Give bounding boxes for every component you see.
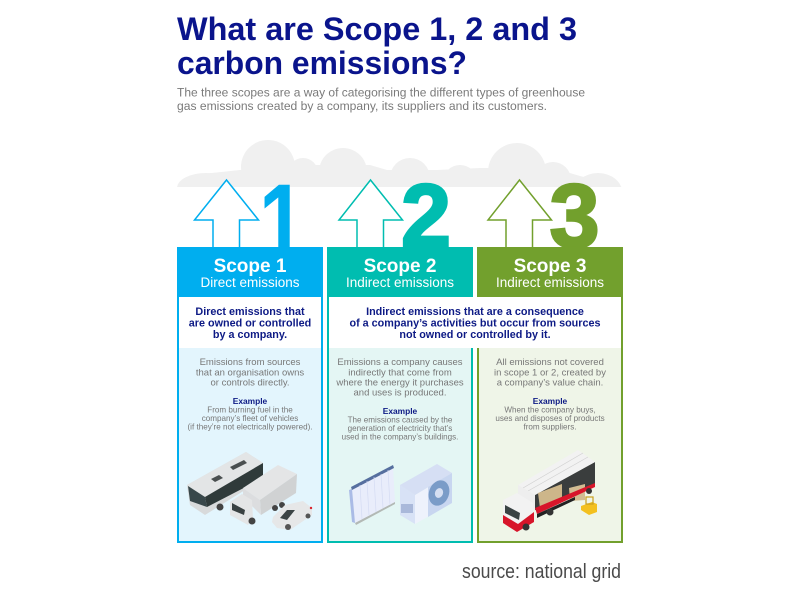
scope 2 header: Indirect emissions — [346, 275, 454, 290]
scope 1 text: Example — [233, 396, 268, 406]
numeral 2: 2 — [401, 167, 451, 267]
scope 3 text: uses and disposes of products — [495, 414, 605, 423]
car — [272, 501, 312, 530]
numeral 3: 3 — [549, 167, 600, 267]
scope 1 text: (if they’re not electrically powered). — [187, 422, 313, 432]
scope 2 text: Example — [383, 406, 418, 416]
scope 3 header — [477, 247, 623, 297]
scope 2 and 3 definition band — [329, 297, 621, 348]
intro text: The three scopes are a way of categorising the different types of greenhouse — [177, 86, 585, 100]
source credit: source: national grid — [462, 561, 621, 583]
scope 3 text: in scope 1 or 2, created by — [494, 368, 606, 378]
scope 1 text: company’s fleet of vehicles — [202, 414, 298, 423]
clouds — [177, 140, 621, 187]
scope 1 definition band: by a company. — [213, 329, 287, 341]
icon: up arrow 3 — [488, 180, 552, 247]
scope 1 text: or controls directly. — [210, 378, 290, 388]
scope 3 text — [494, 357, 606, 432]
scope 3 header: Indirect emissions — [496, 275, 604, 290]
scope 1 definition band: are owned or controlled — [189, 318, 311, 330]
scope 1 header: Direct emissions — [200, 275, 300, 290]
truck — [230, 465, 297, 525]
panel: scope 1 — [178, 248, 322, 542]
numeral 1: 1 — [259, 163, 305, 283]
scope 3 text: from suppliers. — [523, 422, 577, 432]
intro text: gas emissions created by a company, its suppliers and its customers. — [177, 99, 547, 113]
icon: lorry and forklift — [503, 450, 597, 532]
scope 2 text: Emissions a company causes — [337, 357, 463, 368]
scope 3 text: Example — [533, 396, 568, 406]
scope 2 text: The emissions caused by the — [348, 416, 453, 424]
icon: radiator and heat pump — [349, 464, 453, 525]
scope 2 header: Scope 2 — [364, 256, 436, 277]
scope 1 text — [187, 357, 313, 432]
lorry trailer — [518, 450, 595, 518]
radiator — [349, 465, 395, 525]
scope 1 header: Scope 1 — [214, 256, 287, 277]
scope 2 text: used in the company’s buildings. — [342, 432, 458, 442]
scope 1 text: that an organisation owns — [196, 368, 304, 378]
scope 2 text — [335, 357, 464, 442]
intro text — [177, 86, 585, 113]
scope 1 definition band — [179, 297, 321, 348]
forklift — [581, 497, 597, 515]
icon: up arrow 2 — [339, 180, 402, 247]
scope 1 body background — [179, 348, 321, 541]
scope 2 text: and uses is produced. — [354, 388, 446, 398]
scope 2 and 3 definition band: of a company’s activities but occur from sources — [349, 318, 601, 330]
scope 3 text: When the company buys, — [504, 406, 596, 414]
scope 1 header — [177, 247, 323, 297]
scope 3 header: Scope 3 — [514, 256, 586, 277]
scope 2 text: where the energy it purchases — [335, 378, 464, 388]
scope 2 arrow and numeral — [339, 167, 451, 267]
scope 2 text: indirectly that come from — [348, 368, 452, 378]
panel: scope 2 and 3 shared frame — [328, 248, 622, 542]
scope 2 and 3 definition band: Indirect emissions that are a consequence — [366, 306, 584, 318]
scope 1 definition band: Direct emissions that — [195, 306, 305, 318]
title — [177, 11, 577, 81]
scope 2 and 3 definition band: not owned or controlled by it. — [399, 329, 551, 341]
icon: up arrow 1 — [194, 180, 258, 247]
scope 1 text: Emissions from sources — [200, 357, 301, 368]
icon: bus, truck and car — [187, 452, 312, 530]
heat pump — [400, 464, 453, 524]
title: carbon emissions? — [177, 45, 467, 81]
scope 3 text: All emissions not covered — [496, 357, 604, 368]
title: What are Scope 1, 2 and 3 — [177, 11, 577, 47]
scope 3 arrow and numeral — [488, 167, 600, 267]
scope 2 text: generation of electricity that’s — [348, 424, 452, 433]
bus — [187, 452, 263, 515]
scope 2 header — [327, 247, 473, 297]
scope 3 text: a company’s value chain. — [497, 378, 603, 388]
lorry cab — [503, 488, 592, 532]
scope 1 text: From burning fuel in the — [207, 406, 293, 414]
scope 1 arrow and numeral — [194, 163, 305, 283]
